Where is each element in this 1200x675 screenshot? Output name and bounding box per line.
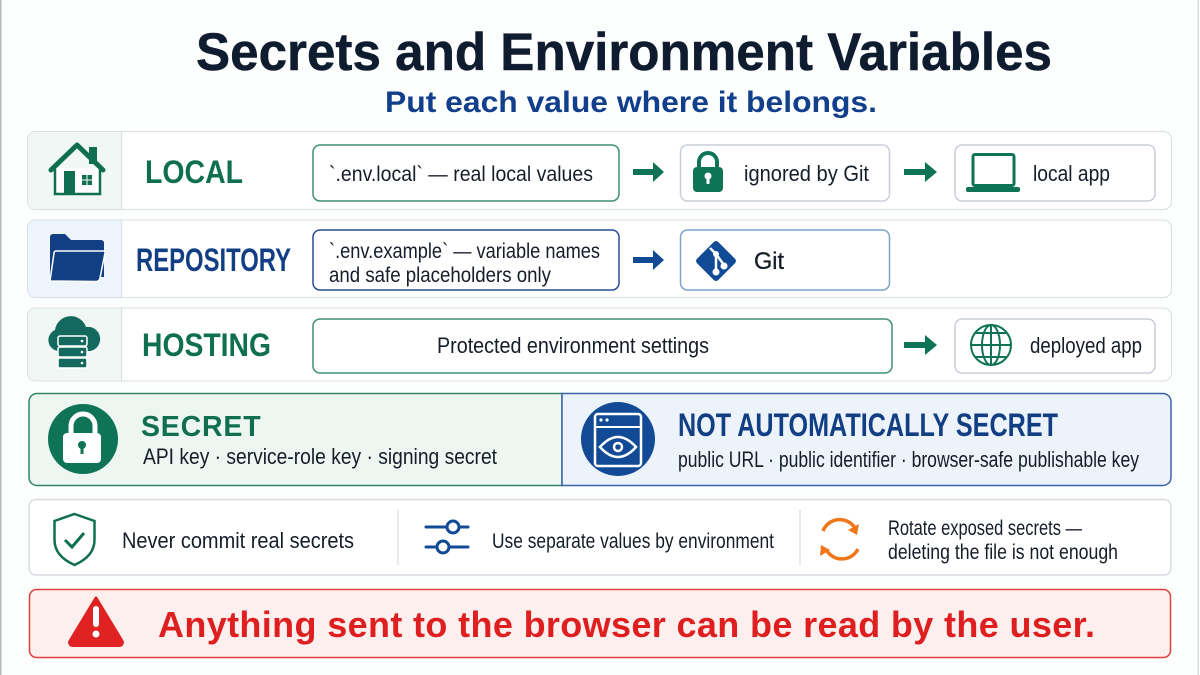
icon: laptop (966, 154, 1020, 192)
title: Secrets and Environment Variables (196, 23, 1052, 82)
box: local app (955, 145, 1155, 201)
box: protected settings: Protected environment settings (437, 333, 709, 358)
icon: shield check (54, 514, 94, 565)
panel: not automatically secret (562, 394, 1171, 486)
icon: house (51, 145, 103, 194)
box: env local: `.env.local` — real local values (329, 163, 593, 186)
icon: warning triangle (70, 598, 122, 646)
heading: not automatically secret: NOT AUTOMATICALLY SECRET (678, 407, 1058, 443)
icon: padlock (693, 153, 723, 192)
box: env example (313, 230, 619, 290)
text: secret examples: API key · service-role key · signing secret (143, 444, 497, 469)
text: tip three (888, 517, 1118, 564)
arrow (633, 162, 664, 182)
text: tip one: Never commit real secrets (122, 528, 354, 553)
icon: cloud server (48, 316, 100, 368)
panel: tips (29, 500, 1171, 575)
box: env example: and safe placeholders only (329, 264, 551, 287)
box: git: Git (754, 248, 784, 275)
box: git (680, 230, 890, 290)
text: tip three: deleting the file is not enough (888, 541, 1118, 564)
warning banner (30, 590, 1170, 658)
arrow (904, 162, 937, 182)
icon: folder (50, 234, 105, 282)
heading: secret: SECRET (141, 411, 261, 443)
icon: sliders (426, 521, 468, 553)
icon: rotate arrows (820, 520, 859, 559)
label: hosting: HOSTING (142, 327, 271, 363)
box: env example: `.env.example` — variable names (329, 240, 600, 263)
icon: globe (971, 325, 1011, 365)
panel: repository row (28, 220, 1172, 298)
box: ignored by git: ignored by Git (744, 161, 869, 186)
box: deployed app: deployed app (1030, 333, 1142, 358)
label: repository: REPOSITORY (136, 242, 291, 278)
icon: git diamond (695, 240, 737, 282)
warning text: Anything sent to the browser can be read by the user. (158, 604, 1095, 645)
box: protected settings (313, 319, 892, 373)
icon: lock badge (48, 404, 118, 474)
box: deployed app (955, 319, 1155, 373)
box: ignored by git (680, 145, 890, 201)
text: tip three: Rotate exposed secrets — (888, 517, 1082, 540)
arrow (904, 335, 937, 355)
text: tip two: Use separate values by environment (492, 530, 774, 553)
panel: local row (28, 132, 1172, 210)
arrow (633, 250, 664, 270)
panel: hosting row (28, 308, 1172, 381)
label: local: LOCAL (145, 154, 243, 190)
icon: browser eye badge (581, 402, 655, 476)
box: local app: local app (1033, 161, 1110, 186)
subtitle: Put each value where it belongs. (385, 86, 877, 119)
panel: secret (29, 394, 562, 486)
box: env local (313, 145, 619, 201)
